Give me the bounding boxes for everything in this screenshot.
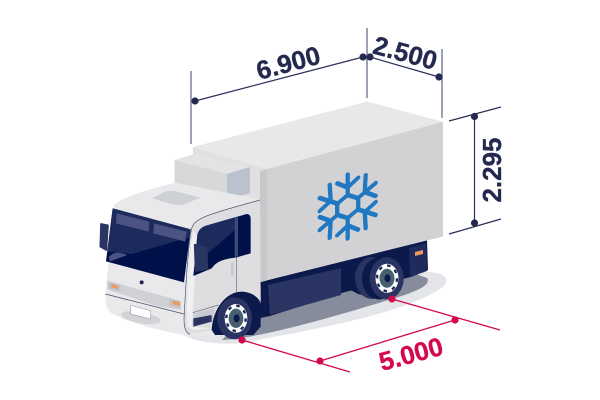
left mirror — [100, 224, 108, 250]
ground shadow — [178, 270, 446, 344]
dimension: 2.500 width: 2.500 — [370, 30, 441, 76]
truck cab — [100, 183, 261, 339]
number plate — [131, 305, 151, 319]
dimension: 6.900 length — [191, 40, 367, 105]
side window — [193, 214, 251, 276]
box front wall — [193, 147, 267, 202]
dimension: 2.295 height — [471, 113, 507, 227]
snowflake icon — [320, 167, 376, 246]
door frame highlight — [187, 231, 212, 330]
box side — [260, 122, 443, 282]
rear wheel — [355, 257, 404, 300]
under-body side box — [268, 268, 341, 315]
roof hatch — [152, 191, 200, 205]
dimension: 5.000 wheelbase: 5.000 — [376, 331, 446, 377]
side mirror — [195, 245, 207, 271]
refrigeration unit — [174, 154, 250, 200]
dimension: 6.900 length: 6.900 — [253, 40, 324, 86]
door handle — [231, 263, 234, 276]
windscreen — [106, 208, 191, 282]
truck chassis and rear wheel — [260, 240, 428, 318]
cab side door panel — [185, 200, 261, 334]
front wheel arch — [212, 292, 261, 335]
dimension: 5.000 wheelbase — [238, 295, 500, 377]
front wheel — [217, 297, 252, 339]
box top — [193, 102, 443, 169]
number plate shadow — [120, 309, 162, 327]
rear bumper box — [409, 243, 427, 277]
cab body — [105, 183, 261, 337]
step — [193, 308, 215, 327]
dimension: 2.295 height: 2.295 — [477, 137, 507, 203]
extension lines — [191, 28, 442, 144]
bumper stripe — [107, 281, 181, 310]
indicator lights — [108, 282, 121, 292]
rear marker light — [415, 250, 423, 256]
cargo box — [193, 102, 443, 282]
under-body dark recess — [341, 255, 380, 298]
dimension lines: navy — [191, 28, 501, 234]
front logo — [140, 280, 144, 284]
